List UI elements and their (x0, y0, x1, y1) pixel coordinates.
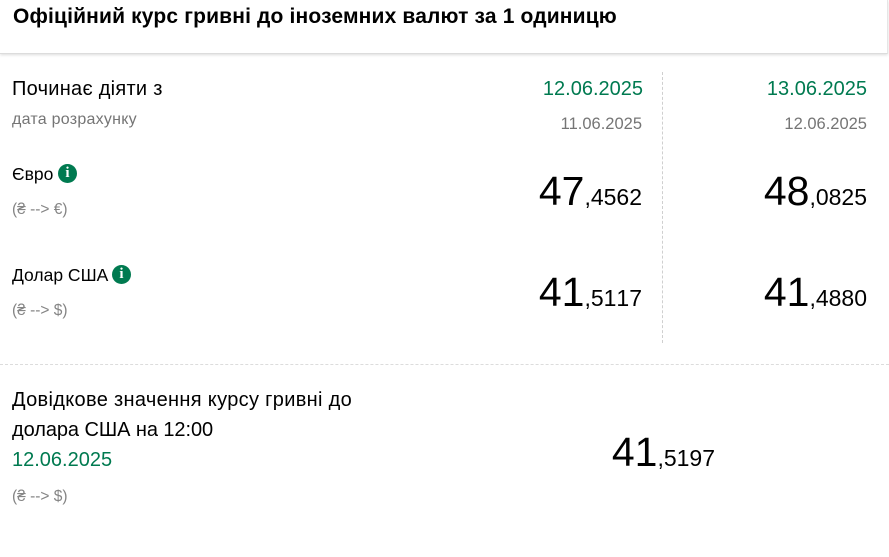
column 2 calculation date: 12.06.2025 (784, 115, 867, 133)
title: Офіційний курс гривні до іноземних валют за 1 одиницю (13, 5, 617, 28)
icon: dollar info: i (119, 266, 124, 282)
section divider (0, 364, 889, 365)
label: us dollar: Долар США (12, 265, 108, 285)
reference rate value: 41,5197 (612, 429, 715, 475)
header bar (0, 0, 888, 54)
column 1 effective date: 12.06.2025 (543, 78, 643, 100)
reference rate label: Довідкове значення курсу гривні до (12, 389, 352, 411)
label: calculation date: дата розрахунку (12, 111, 137, 128)
reference rate label: долара США на 12:00 (12, 419, 213, 441)
reference direction note: (₴ --> $) (12, 488, 68, 505)
dollar rate column 2: 41,4880 (764, 269, 867, 315)
icon: euro info: i (65, 165, 70, 181)
icon: dollar info (112, 265, 131, 284)
icon: euro info (58, 164, 77, 183)
column 1 calculation date: 11.06.2025 (561, 115, 642, 133)
label: starts from: Починає діяти з (12, 78, 163, 100)
dollar rate column 1: 41,5117 (539, 269, 642, 315)
euro rate column 1: 47,4562 (539, 168, 642, 214)
label: euro: Євро (12, 164, 53, 184)
euro rate column 2: 48,0825 (764, 168, 867, 214)
column divider (662, 72, 663, 343)
reference rate date: 12.06.2025 (12, 449, 112, 471)
reference rate label (12, 389, 352, 441)
dollar direction note: (₴ --> $) (12, 302, 68, 319)
euro direction note: (₴ --> €) (12, 201, 68, 218)
column 2 effective date: 13.06.2025 (767, 78, 867, 100)
